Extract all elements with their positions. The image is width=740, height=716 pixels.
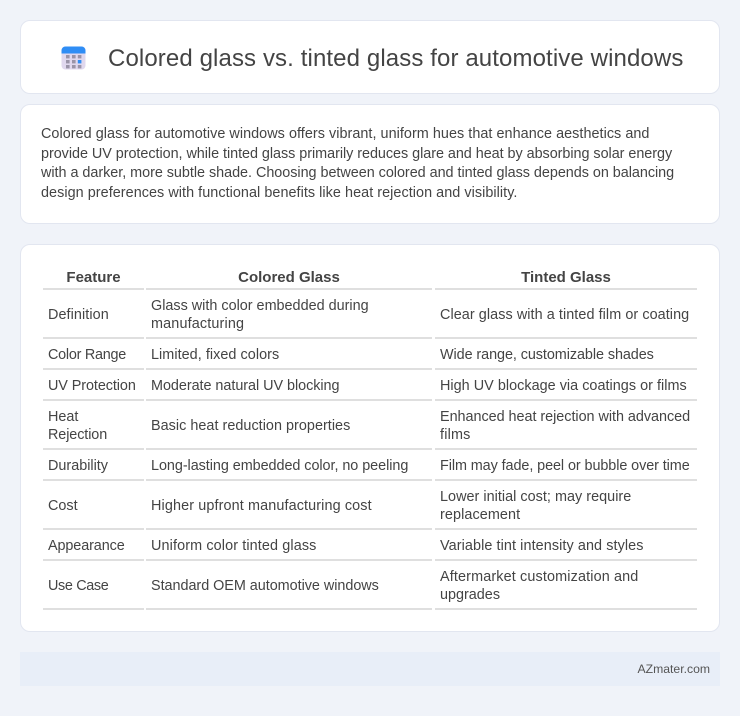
row: Definition: Definition [48, 307, 109, 323]
row: Definition: manufacturing [151, 316, 244, 332]
row: Heat Rejection: Enhanced heat rejection with advanced [440, 409, 690, 425]
row: Appearance [48, 538, 644, 554]
row: Use Case: Standard OEM automotive windows [151, 578, 379, 594]
row: Color Range: Wide range, customizable shades [440, 347, 654, 363]
table header [66, 269, 611, 286]
footer bar [20, 652, 720, 686]
row: Definition: Glass with color embedded during [151, 298, 369, 314]
row: UV Protection [48, 378, 687, 394]
row: Use Case: upgrades [440, 587, 500, 603]
row: Color Range [48, 347, 654, 363]
table header: Tinted Glass [521, 269, 611, 286]
panel: title card [20, 20, 720, 94]
row: Heat Rejection [48, 409, 690, 443]
text block: summary: provide UV protection, while tinted glass primarily reduces glare and heat by absorbing solar energy [41, 146, 672, 162]
row: Durability: Durability [48, 458, 108, 474]
text block: summary [41, 126, 674, 200]
row: Appearance: Uniform color tinted glass [151, 538, 316, 554]
row: Color Range: Color Range [48, 347, 126, 363]
row: Cost: Lower initial cost; may require [440, 489, 631, 505]
row: Definition: Clear glass with a tinted film or coating [440, 307, 689, 323]
row: UV Protection: UV Protection [48, 378, 136, 394]
row: UV Protection: Moderate natural UV blocking [151, 378, 339, 394]
row: Heat Rejection: Rejection [48, 427, 107, 443]
row: Cost: Higher upfront manufacturing cost [151, 498, 372, 514]
row: Definition [48, 298, 689, 332]
panel: comparison table [20, 244, 720, 632]
table header: Feature [66, 269, 121, 286]
title: Colored glass vs. tinted glass for automotive windows [108, 45, 683, 72]
table header: Colored Glass [238, 269, 340, 286]
text block: summary: with a darker, more subtle shade. Choosing between colored and tinted glass depends on balancing [41, 165, 674, 181]
row: Use Case: Use Case [48, 578, 108, 594]
icon: calendar [62, 46, 86, 70]
row: Durability: Film may fade, peel or bubble over time [440, 458, 690, 474]
row: Appearance: Variable tint intensity and styles [440, 538, 644, 554]
panel: introduction [20, 104, 720, 224]
row: Cost: replacement [440, 507, 520, 523]
row: Heat Rejection: Basic heat reduction properties [151, 418, 350, 434]
row: Durability [48, 458, 690, 474]
row: Cost: Cost [48, 498, 78, 514]
row: Heat Rejection: films [440, 427, 471, 443]
row: Heat Rejection: Heat [48, 409, 78, 425]
text block: summary: Colored glass for automotive windows offers vibrant, uniform hues that enhance aesthetics and [41, 126, 649, 142]
row: UV Protection: High UV blockage via coatings or films [440, 378, 687, 394]
row: Color Range: Limited, fixed colors [151, 347, 279, 363]
footer credit: AZmater.com [638, 662, 710, 676]
text block: summary: design preferences with functional benefits like heat rejection and visibility. [41, 184, 517, 200]
row: Durability: Long-lasting embedded color, no peeling [151, 458, 408, 474]
row: Cost [48, 489, 631, 523]
row: Appearance: Appearance [48, 538, 125, 554]
row: Use Case: Aftermarket customization and [440, 569, 638, 585]
